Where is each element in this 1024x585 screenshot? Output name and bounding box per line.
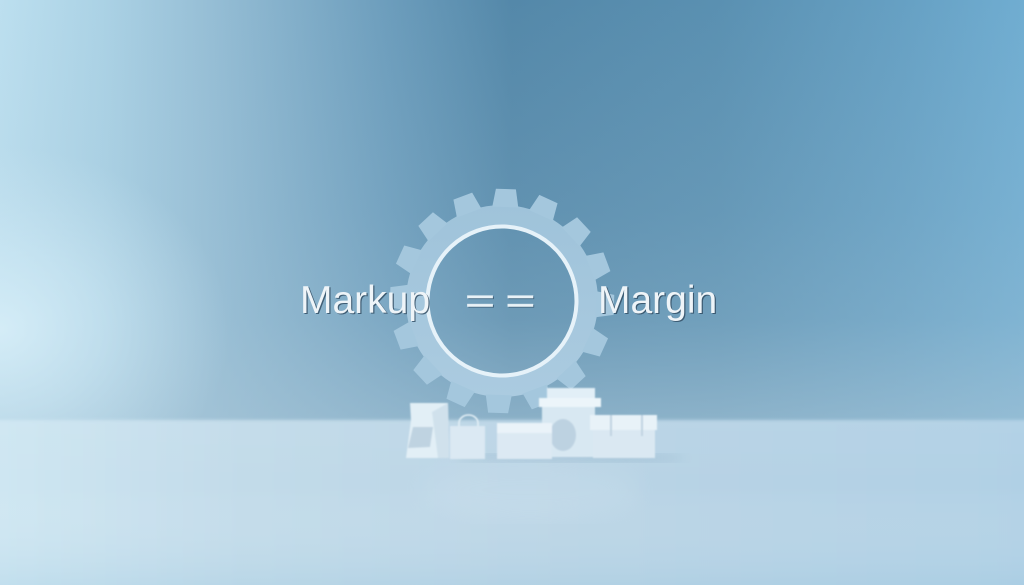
icon: gear inner ring <box>425 224 579 378</box>
icon: tall jar box <box>539 388 601 457</box>
icon: cube box <box>590 415 657 458</box>
label: Markup: Markup <box>300 279 430 322</box>
label: Margin: Margin <box>598 279 717 322</box>
illustration: product packages <box>406 388 685 518</box>
icon: shopping bag <box>450 415 485 459</box>
equals signs: = = <box>466 284 537 321</box>
label: Margin: Margin <box>599 280 718 323</box>
label: Markup: Markup <box>301 280 431 323</box>
icon: gear <box>386 185 618 417</box>
icon: flat box <box>497 423 552 459</box>
equals signs: = = <box>465 283 535 320</box>
icon: shelf display package <box>406 403 449 458</box>
